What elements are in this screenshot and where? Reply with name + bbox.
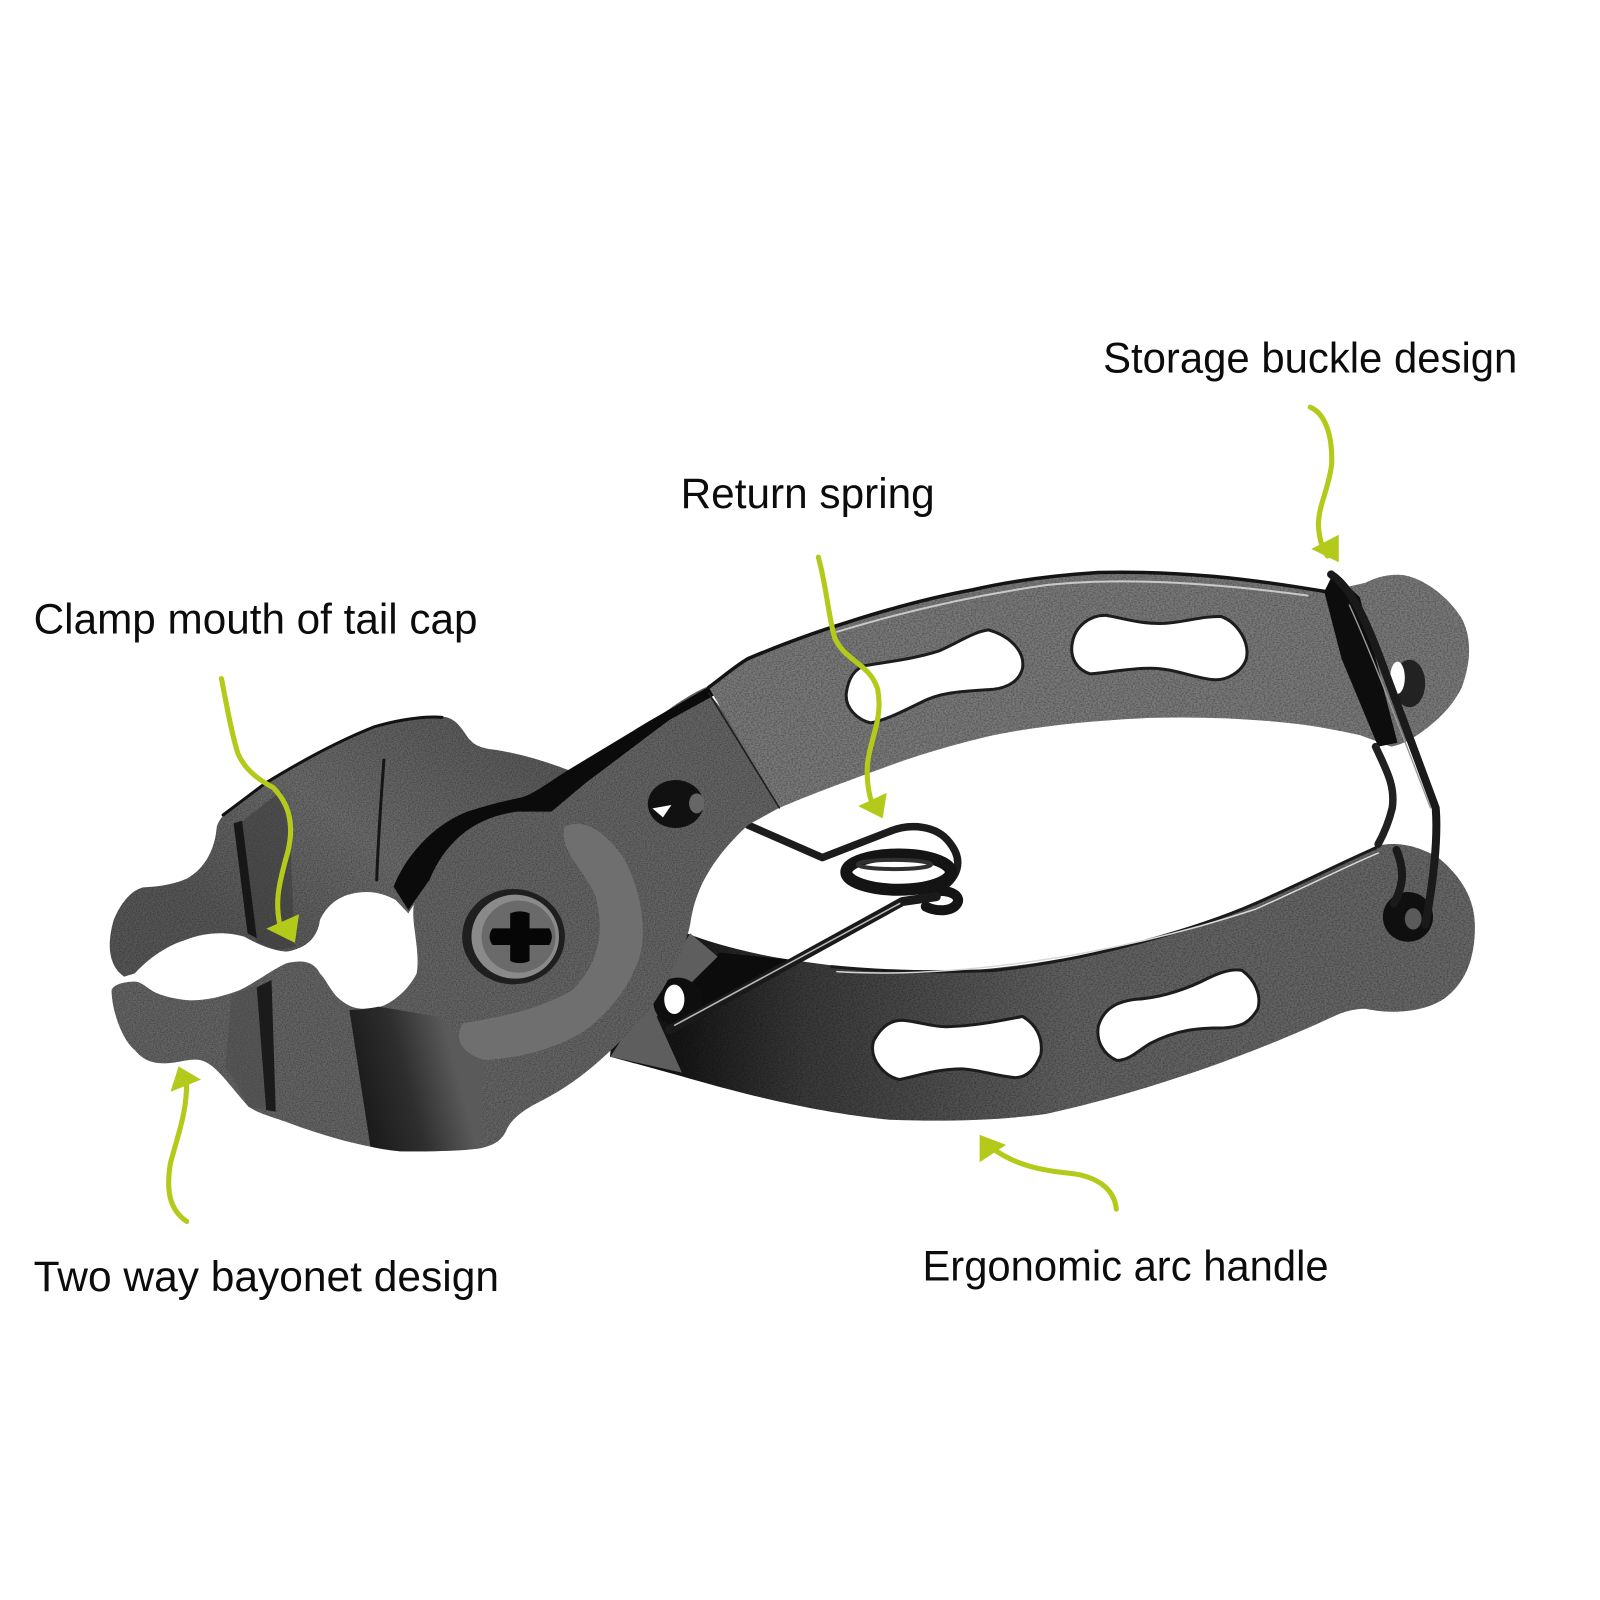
upper jaw edge highlight — [223, 717, 442, 815]
upper handle with storage end — [709, 572, 1469, 942]
dark fold of lower handle — [675, 952, 791, 1014]
upper handle slot 2 — [1072, 615, 1247, 680]
arrows and labels (display grid) — [34, 334, 1517, 1301]
lower handle slot 2 — [1098, 970, 1259, 1060]
label: Clamp mouth of tail cap: Clamp mouth of tail cap — [34, 596, 478, 644]
handle seam — [709, 693, 779, 808]
upper jaw crease lines — [377, 760, 384, 880]
lower handle — [610, 844, 1475, 1121]
arrow: storage buckle — [1310, 407, 1339, 562]
label: Ergonomic arc handle: Ergonomic arc handle — [922, 1243, 1329, 1291]
return spring — [670, 825, 958, 1030]
arrow: ergonomic handle — [980, 1135, 1116, 1209]
pivot screw — [462, 889, 565, 984]
illustration: chain link pliers — [110, 572, 1475, 1151]
handle top edge — [709, 572, 1326, 687]
upper handle slot 1 — [846, 630, 1023, 723]
retouched grey crescent — [459, 824, 643, 1060]
lower rivet — [1383, 892, 1433, 942]
label: Storage buckle design: Storage buckle design — [1103, 334, 1517, 382]
lower handle slot 1 — [873, 1016, 1041, 1080]
neck hole — [648, 780, 704, 828]
dark lower jaw facet — [349, 1007, 484, 1151]
label: Return spring: Return spring — [681, 470, 935, 518]
arrow: two way bayonet — [169, 1066, 201, 1221]
black slot between jaw and handle — [394, 682, 724, 910]
arrow: return spring — [818, 557, 887, 818]
buckle wire — [1331, 574, 1436, 925]
jaws and pivot disk — [110, 682, 780, 1151]
arrow: clamp mouth — [221, 679, 299, 943]
lower jaw, pivot disk and neck — [112, 687, 780, 1151]
upper jaw — [110, 717, 572, 977]
lower handle root behind the pivot — [610, 933, 718, 1073]
label: Two way bayonet design: Two way bayonet design — [34, 1253, 499, 1301]
end hole — [1390, 660, 1425, 707]
lower jaw crease strip — [225, 985, 265, 1110]
dark band of buckle plate — [1324, 573, 1398, 747]
